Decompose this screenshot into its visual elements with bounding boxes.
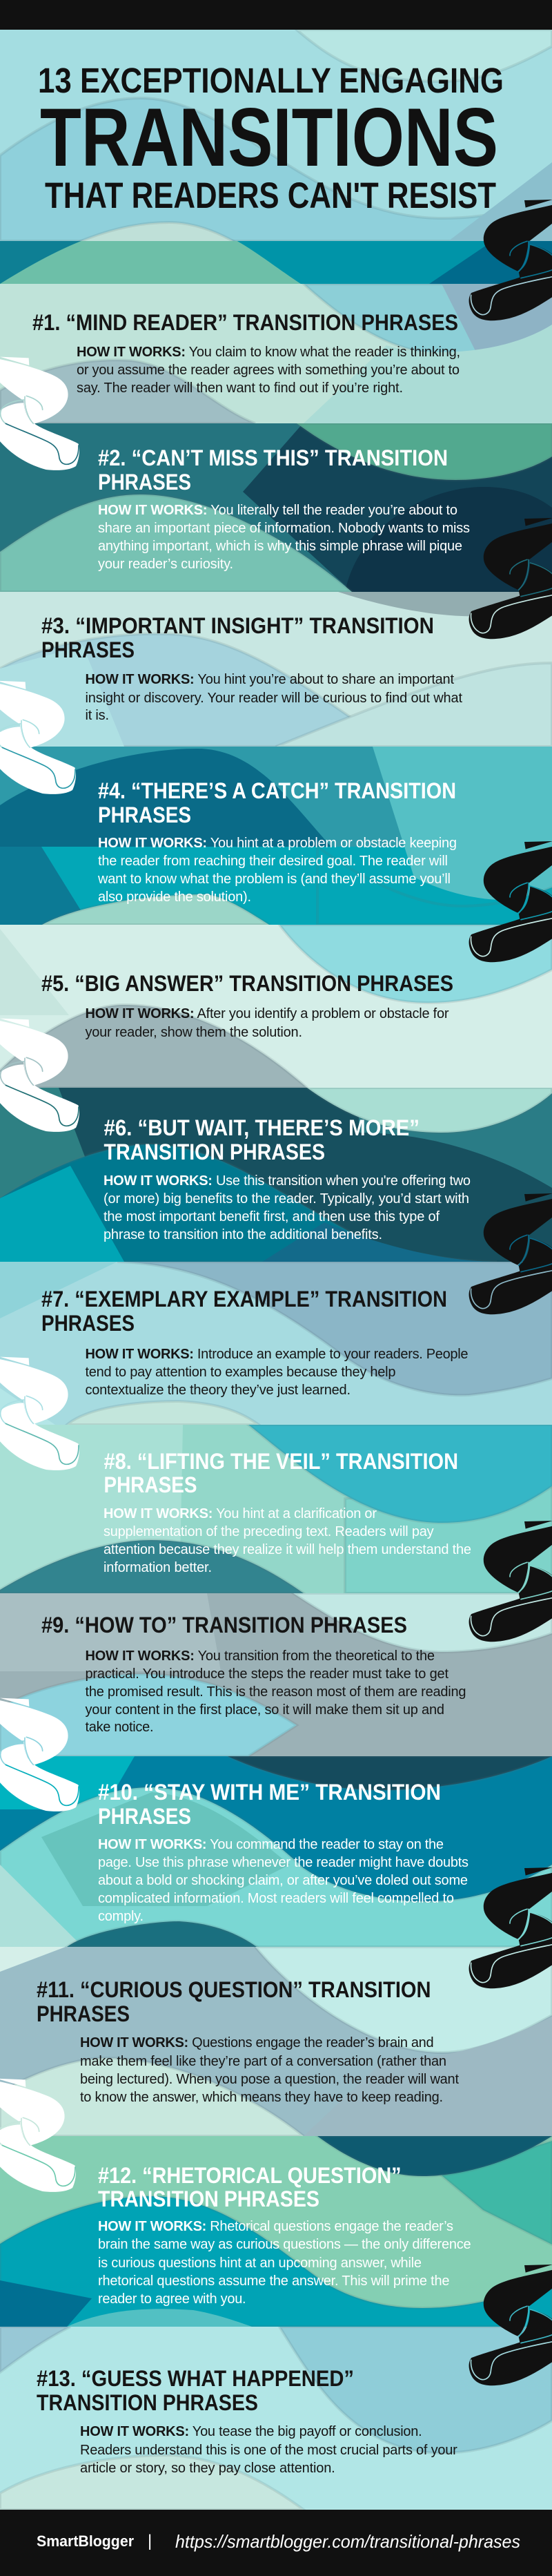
body 10: HOW IT WORKS: You command the reader to stay on the (98, 1837, 444, 1852)
icon: black chain link 6 (469, 1867, 552, 1988)
body 4: also provide the solution). (98, 890, 251, 905)
body 10: comply. (98, 1909, 144, 1924)
heading 6: #6. “BUT WAIT, THERE’S MORE” (103, 1115, 420, 1140)
body 6: the most important benefit first, and then use this type of (103, 1209, 440, 1224)
section 12 (98, 2163, 471, 2307)
heading 10: #10. “STAY WITH ME” TRANSITION (98, 1780, 441, 1805)
icon: black chain link 2 (469, 518, 552, 639)
body 4: want to know what the problem is (and they’ll assume you’ll (97, 872, 451, 887)
heading 3 (41, 613, 434, 662)
section 9 (41, 1613, 466, 1735)
body 8: attention because they realize it will help them understand the (103, 1542, 471, 1557)
heading 11: PHRASES (37, 2001, 130, 2026)
body 12: is curious questions hint at an upcoming answer, while (98, 2256, 422, 2271)
icon: white chain link 4 (0, 1357, 79, 1470)
icon: white chain link 1 (0, 357, 79, 470)
heading 7: PHRASES (41, 1311, 135, 1336)
title (38, 61, 504, 216)
body 11: to know the answer, which means they have to keep reading. (80, 2090, 443, 2105)
heading 2: PHRASES (98, 470, 191, 494)
body 4: the reader from reaching their desired goal. The reader will (98, 854, 448, 869)
body 9 (86, 1649, 466, 1735)
heading 4: #4. “THERE’S A CATCH” TRANSITION (98, 778, 456, 803)
heading 10 (98, 1780, 441, 1829)
body 8: information better. (103, 1560, 212, 1575)
body 10: about a bold or shocking claim, or after you’ve doled out some (98, 1873, 468, 1888)
body 2: HOW IT WORKS: You literally tell the reader you’re about to (98, 503, 457, 518)
body 13: article or story, so they pay close attention. (80, 2461, 335, 2476)
body 6: phrase to transition into the additional benefits. (103, 1227, 382, 1242)
heading 2: #2. “CAN’T MISS THIS” TRANSITION (98, 445, 448, 470)
body 3: it is. (86, 708, 109, 723)
icon: black chain link 4 (469, 1193, 552, 1314)
body 11: HOW IT WORKS: Questions engage the reader’s brain and (80, 2035, 434, 2050)
heading 13 (37, 2366, 354, 2415)
body 5: your reader, show them the solution. (86, 1025, 302, 1040)
body 2: share an important piece of information. Nobody wants to miss (98, 521, 470, 536)
section 3 (41, 613, 462, 723)
heading 12 (98, 2163, 402, 2211)
icon: black chain link 1 (469, 200, 552, 320)
body 1: say. The reader will then want to find out if you’re right. (77, 381, 403, 396)
body 12: brain the same way as curious questions — the only difference (98, 2237, 471, 2252)
section 4 (97, 778, 457, 905)
body 12: rhetorical questions assume the answer. This will prime the (98, 2274, 450, 2289)
heading 13: #13. “GUESS WHAT HAPPENED” (37, 2366, 354, 2391)
section 2 (98, 445, 470, 572)
section 1 (32, 310, 460, 396)
footer brand: SmartBlogger (37, 2532, 134, 2550)
body 2: your reader’s curiosity. (98, 557, 233, 572)
body 8 (103, 1506, 471, 1575)
section 11 (37, 1977, 459, 2105)
heading 9: #9. “HOW TO” TRANSITION PHRASES (41, 1613, 407, 1637)
heading 6: TRANSITION PHRASES (103, 1140, 325, 1164)
body 13: HOW IT WORKS: You tease the big payoff or conclusion. (80, 2424, 422, 2439)
body 9: take notice. (86, 1720, 153, 1735)
footer url: https://smartblogger.com/transitional-phrases (175, 2531, 520, 2552)
body 2 (98, 503, 470, 572)
body 7: contextualize the theory they’ve just learned. (86, 1383, 351, 1398)
body 1: or you assume the reader agrees with something you’re about to (77, 363, 460, 378)
body 9: the promised result. This is the reason most of them are reading (86, 1684, 466, 1700)
section 6 (103, 1115, 471, 1242)
body 12 (98, 2219, 471, 2307)
body 13 (80, 2424, 457, 2476)
section 5 (41, 971, 453, 1040)
heading 7 (41, 1287, 447, 1336)
body 5: HOW IT WORKS: After you identify a problem or obstacle for (86, 1006, 449, 1021)
body 1 (77, 345, 460, 396)
body 12: reader to agree with you. (98, 2291, 246, 2307)
body 8: HOW IT WORKS: You hint at a clarification or (103, 1506, 377, 1521)
icon: black chain link 3 (469, 841, 552, 962)
body 7: HOW IT WORKS: Introduce an example to your readers. People (86, 1347, 468, 1362)
body 3: insight or discovery. Your reader will be curious to find out what (86, 691, 462, 706)
icon: black chain link 7 (469, 2265, 552, 2385)
body 2: anything important, which is why this simple phrase will pique (98, 539, 462, 554)
heading 4: PHRASES (98, 802, 191, 827)
section 8 (103, 1449, 471, 1575)
heading 8 (103, 1449, 458, 1497)
section 13 (37, 2366, 457, 2476)
heading 12: #12. “RHETORICAL QUESTION” (98, 2163, 402, 2188)
body 7 (86, 1347, 468, 1398)
body 7: tend to pay attention to examples because they help (86, 1365, 396, 1380)
heading 6 (103, 1115, 420, 1164)
body 4 (97, 836, 457, 905)
icon: white chain link 5 (0, 1698, 79, 1811)
body 10: complicated information. Most readers will feel compelled to (98, 1891, 454, 1906)
section 7 (41, 1287, 468, 1398)
icon: white chain link 6 (0, 2079, 76, 2192)
body 6 (103, 1173, 471, 1242)
body 13: Readers understand this is one of the most crucial parts of your (80, 2443, 457, 2458)
body 10 (98, 1837, 469, 1924)
body 3 (86, 672, 462, 723)
body 1: HOW IT WORKS: You claim to know what the reader is thinking, (77, 345, 460, 360)
body 12: HOW IT WORKS: Rhetorical questions engage the reader’s (98, 2219, 453, 2234)
heading 8: PHRASES (103, 1472, 197, 1497)
icon: white chain link 2 (0, 681, 76, 794)
heading 1: #1. “MIND READER” TRANSITION PHRASES (32, 310, 458, 335)
heading 12: TRANSITION PHRASES (98, 2186, 319, 2211)
body 6: (or more) big benefits to the reader. Typically, you’d start with (103, 1191, 469, 1207)
icon: black chain link 5 (469, 1521, 552, 1642)
heading 11 (37, 1977, 431, 2026)
heading 10: PHRASES (98, 1804, 191, 1829)
body 11: being lectured). When you pose a question, the reader will want (80, 2072, 459, 2087)
body 4: HOW IT WORKS: You hint at a problem or obstacle keeping (98, 836, 457, 851)
body 9: practical. You introduce the steps the reader must take to get (86, 1666, 448, 1682)
heading 7: #7. “EXEMPLARY EXAMPLE” TRANSITION (41, 1287, 447, 1311)
heading 5: #5. “BIG ANSWER” TRANSITION PHRASES (41, 971, 453, 996)
heading 4 (98, 778, 456, 827)
body 5 (86, 1006, 449, 1040)
body 3: HOW IT WORKS: You hint you’re about to share an important (86, 672, 454, 687)
section 10 (98, 1780, 469, 1924)
heading 2 (98, 445, 448, 494)
body 9: HOW IT WORKS: You transition from the theoretical to the (86, 1649, 435, 1664)
top black bar (0, 0, 552, 30)
body 6: HOW IT WORKS: Use this transition when you're offering two (103, 1173, 471, 1189)
heading 8: #8. “LIFTING THE VEIL” TRANSITION (103, 1449, 458, 1474)
body 9: your content in the first place, so it will make them sit up and (86, 1702, 444, 1718)
heading 3: PHRASES (41, 637, 135, 662)
icon: white chain link 3 (0, 1019, 79, 1132)
footer separator: | (148, 2532, 152, 2550)
body 10: page. Use this phrase whenever the reader might have doubts (98, 1855, 469, 1870)
body 11 (80, 2035, 459, 2105)
body 11: make them feel like they’re part of a conversation (rather than (80, 2054, 446, 2069)
heading 3: #3. “IMPORTANT INSIGHT” TRANSITION (41, 613, 434, 638)
heading 13: TRANSITION PHRASES (37, 2390, 258, 2415)
body 8: supplementation of the preceding text. Readers will pay (103, 1524, 434, 1539)
heading 11: #11. “CURIOUS QUESTION” TRANSITION (37, 1977, 431, 2002)
footer bar (0, 2510, 552, 2576)
